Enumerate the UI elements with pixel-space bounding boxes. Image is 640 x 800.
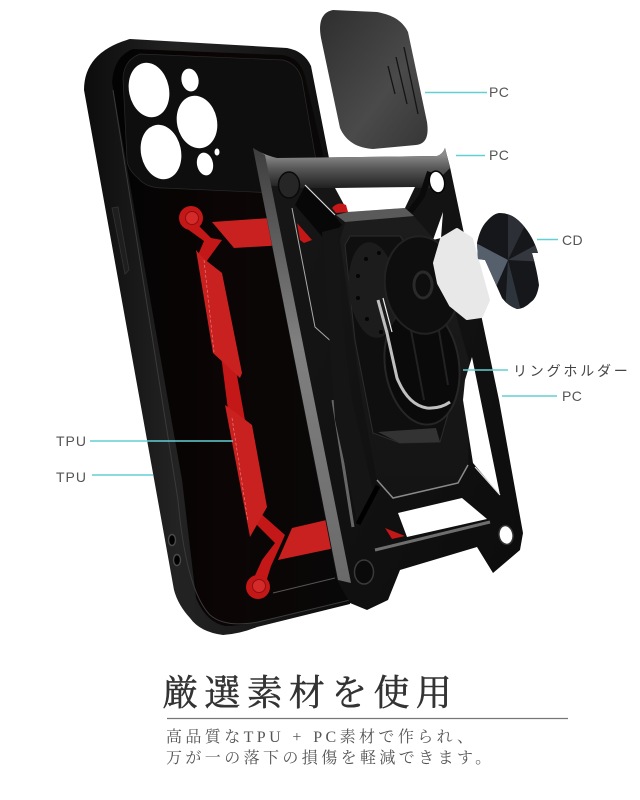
top right hole — [427, 170, 447, 194]
ring disc — [379, 231, 465, 339]
callout: PC rail — [502, 388, 582, 404]
red through bottom window — [385, 528, 405, 539]
ring holder — [344, 230, 488, 430]
description text — [166, 727, 495, 767]
red tip beside bevel — [297, 223, 312, 243]
red spot in top window — [332, 204, 348, 213]
heading: 厳選素材を使用 — [162, 673, 458, 713]
callout: CD — [537, 232, 583, 248]
white adhesive pad — [435, 230, 488, 318]
side button — [112, 207, 129, 274]
top left screw — [278, 172, 300, 198]
description text: 高品質なTPU + PC素材で作られ、 — [166, 727, 476, 746]
callout: PC cover: PC — [489, 84, 509, 100]
frame body — [253, 148, 523, 610]
callout: PC rail: PC — [562, 388, 582, 404]
black ring — [377, 300, 467, 430]
callout: ring holder: リングホルダー — [513, 363, 631, 379]
speaker holes — [168, 534, 176, 546]
bottom window lower bevel — [375, 522, 490, 550]
right upper opening — [433, 212, 443, 240]
cover grip slots — [388, 47, 418, 114]
bottom left screw — [354, 560, 374, 584]
camera plateau — [123, 54, 322, 195]
description text: 万が一の落下の損傷を軽減できます。 — [166, 748, 495, 767]
callout: PC frame: PC — [489, 147, 509, 163]
CD metal plate — [477, 213, 539, 309]
hinge slot — [414, 272, 432, 298]
seam lines — [113, 90, 350, 624]
central top rim — [336, 208, 414, 222]
camera holes — [124, 59, 174, 121]
bottom right hole — [497, 524, 515, 546]
right window — [463, 357, 500, 495]
metal frame — [253, 148, 523, 610]
case side band — [84, 39, 350, 635]
callout: TPU case: TPU — [56, 469, 87, 485]
red circular mounts — [179, 206, 203, 230]
studded plate — [344, 240, 402, 340]
callout: PC cover — [425, 84, 509, 100]
frame facets — [295, 186, 342, 240]
red arms — [186, 224, 222, 262]
case face — [112, 49, 350, 626]
frame top bevel — [255, 148, 450, 188]
frame left bevel — [253, 148, 351, 583]
heading rule — [167, 718, 568, 720]
metal ring — [378, 300, 450, 408]
bottom window — [398, 498, 487, 537]
phone case — [84, 39, 350, 635]
callout: TPU case — [56, 469, 153, 485]
callout: CD: CD — [562, 232, 583, 248]
red TPU bumper — [179, 206, 335, 599]
plate studs — [356, 251, 383, 334]
hex plate — [345, 236, 452, 443]
camera slide cover — [320, 10, 428, 149]
red textured pads — [212, 217, 285, 248]
central body — [340, 212, 470, 498]
callout: PC frame — [456, 147, 509, 163]
top window — [335, 187, 415, 212]
callout: TPU bumper: TPU — [56, 433, 87, 449]
